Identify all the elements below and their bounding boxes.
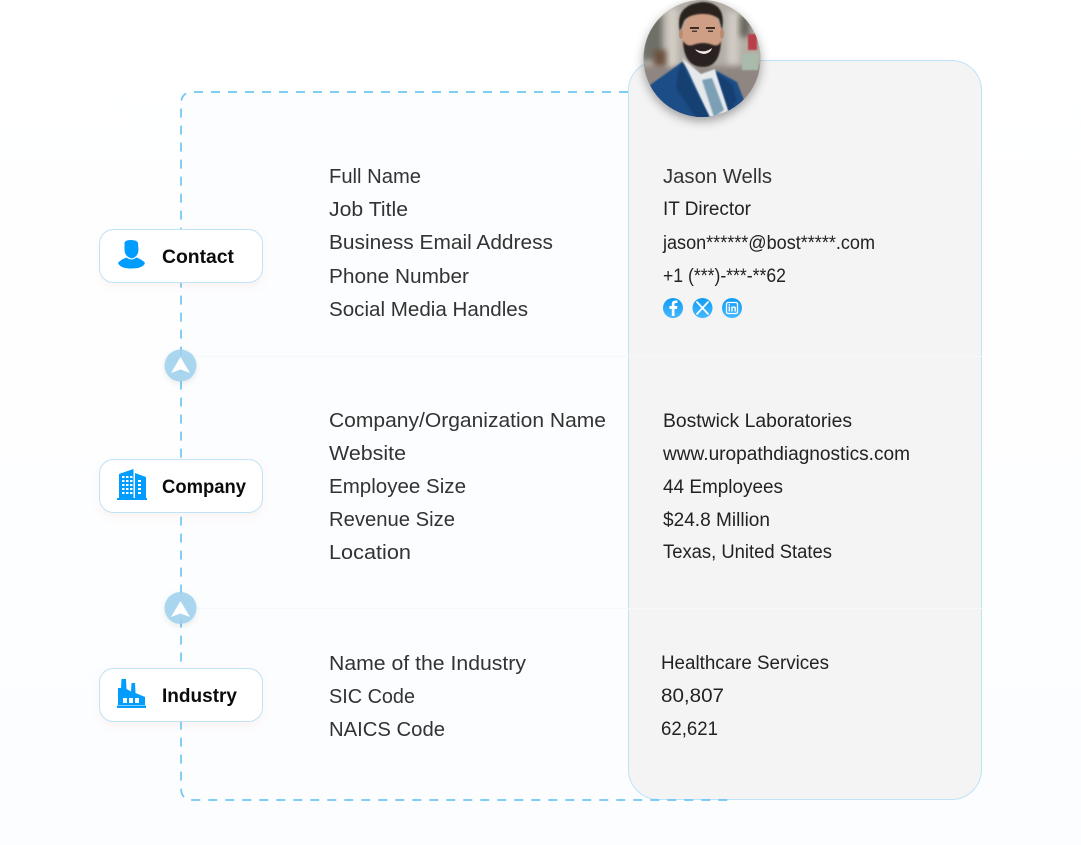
text block: industry values: Healthcare Services [661,653,829,674]
text block: company field names: Employee Size [329,476,466,498]
text block: contact field names: Full Name [329,166,421,188]
text block: company values: 44 Employees [663,477,783,498]
row divider: contact and company [197,356,982,358]
text block: contact field names: Business Email Address [329,232,553,254]
content area tint [181,92,631,800]
text block: contact values [662,166,875,287]
text block: industry values: 80,807 [661,686,724,707]
text block: industry field names: Name of the Industry [329,653,526,675]
text block: company field names: Website [329,443,406,465]
text block: contact values: jason******@bost*****.com [662,233,875,254]
text block: contact field names: Phone Number [329,266,469,288]
text block: company values [662,411,910,563]
label: contact: Contact [162,247,235,268]
text block: industry field names [329,653,526,741]
label: industry: Industry [162,686,237,707]
row divider: company and industry [197,608,982,610]
text block: contact values: IT Director [663,199,752,220]
icons: social media [663,298,742,318]
text block: contact field names [329,166,553,321]
dashed connector line [181,92,730,800]
text block: company field names: Company/Organization Name [329,410,606,432]
icon: x [692,298,712,318]
icon: industry factory [117,679,146,708]
icon: facebook [663,298,683,318]
arrow node: contact to company [164,350,196,382]
panel: values column [628,60,982,800]
icon: contact person [118,240,145,268]
text block: company values: Texas, United States [663,542,832,563]
text block: industry field names: NAICS Code [329,719,445,741]
text block: industry field names: SIC Code [329,686,415,708]
text block: company values: $24.8 Million [663,510,770,531]
label: company: Company [162,477,246,498]
text block: company values: Bostwick Laboratories [663,411,852,432]
text block: contact field names: Job Title [329,199,408,221]
arrow node: company to industry [164,592,196,624]
text block: company field names [329,410,606,564]
text block: contact field names: Social Media Handles [329,299,528,321]
card: contact [100,230,262,282]
icon: company building [117,469,147,500]
text block: industry values: 62,621 [661,719,718,740]
text block: company values: www.uropathdiagnostics.com [662,444,910,465]
text block: contact values: Jason Wells [663,166,772,188]
text block: contact values: +1 (***)-***-**62 [663,266,786,287]
card: industry [100,668,262,722]
icon: linkedin [722,298,742,318]
text block: company field names: Revenue Size [329,509,455,531]
text block: industry values [661,653,829,740]
text block: company field names: Location [329,542,411,564]
card: company [100,460,262,512]
icon: portrait photo [640,0,765,121]
